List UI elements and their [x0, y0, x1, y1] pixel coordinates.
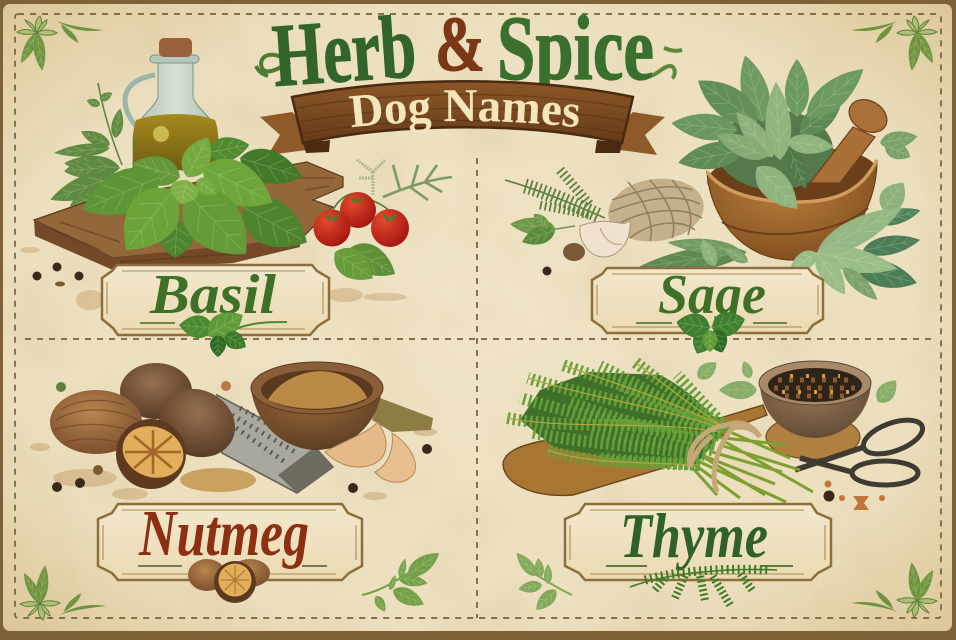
thyme bundle [507, 362, 728, 466]
title flourish left [256, 55, 290, 76]
ribbon grain [297, 94, 628, 134]
corner sprig: bottom left [20, 565, 106, 620]
overlapping leaf [786, 132, 835, 157]
title ampersand: & [435, 0, 485, 87]
green peppercorn [56, 382, 66, 392]
stains [20, 247, 407, 310]
panel: thyme [503, 357, 927, 615]
title flourish right [645, 48, 682, 78]
grater [217, 395, 333, 493]
sage bunch [670, 52, 872, 192]
bowl rim [707, 160, 877, 202]
pestle [810, 127, 875, 183]
banner [260, 80, 665, 155]
round board [766, 415, 860, 459]
cutting board [503, 405, 767, 495]
title word: Spice: Spice [497, 0, 654, 99]
vertical divider [476, 158, 478, 618]
pale dill [357, 160, 385, 195]
herb sprig [362, 547, 444, 614]
label [565, 500, 831, 605]
label text: Nutmeg [138, 497, 309, 570]
label text: Basil [149, 264, 276, 326]
ground spice [180, 468, 256, 492]
small leaves [693, 357, 903, 407]
basil leaves [74, 131, 318, 273]
horizontal divider [25, 338, 932, 340]
sage sprig right [785, 176, 922, 305]
twine [689, 423, 760, 492]
spice stains [30, 428, 437, 500]
pestle head [843, 93, 893, 139]
label sprig [674, 308, 748, 358]
label sprig [630, 569, 777, 605]
garlic [542, 220, 630, 276]
tomatoes [314, 192, 409, 247]
peppercorns [52, 381, 432, 493]
herb sprig [512, 549, 572, 615]
small floating sprig [879, 128, 919, 165]
scissors [795, 413, 927, 485]
small sprig [509, 210, 575, 250]
board edge [34, 220, 300, 270]
herb sprigs behind [46, 83, 126, 214]
bowl groove [722, 208, 868, 234]
grater holes [232, 408, 305, 462]
ribbon main [292, 81, 633, 143]
label [102, 264, 329, 357]
label underlines [606, 565, 793, 567]
front leaf [747, 157, 808, 219]
tomato vines [332, 193, 390, 212]
label underlines [138, 565, 327, 567]
twine ball [604, 173, 708, 247]
corner sprig: top right [851, 16, 937, 71]
corner sprig: bottom right [851, 562, 937, 617]
peppercorns [32, 262, 84, 286]
mortar bowl interior [705, 142, 879, 210]
subtitle: Dog Names [348, 90, 578, 130]
thyme stems [690, 432, 813, 502]
panel: nutmeg [30, 362, 444, 614]
bowl body [707, 160, 877, 260]
panel: basil [20, 38, 452, 357]
wood block [372, 398, 433, 432]
title [256, 0, 682, 106]
spice bowl [251, 362, 383, 450]
label [592, 264, 823, 358]
rosemary sprig [505, 170, 605, 218]
ribbon fold shadows [303, 140, 622, 153]
oil bottle [125, 38, 218, 170]
peppercorn and stains [824, 480, 885, 510]
label underlines [636, 322, 787, 324]
label underlines [140, 322, 175, 324]
green dill sprig [383, 165, 452, 200]
whole nutmegs [50, 363, 246, 489]
garlic cloves [325, 422, 415, 482]
herb garnish [327, 236, 402, 290]
label text: Sage [658, 264, 766, 326]
board grain [50, 178, 335, 262]
label text: Thyme [620, 500, 768, 571]
nutmeg slices [188, 559, 270, 603]
panel: sage [505, 52, 922, 358]
cutting board [34, 162, 343, 258]
label [98, 497, 362, 603]
pepper bowl [759, 361, 871, 438]
grater handle plate [278, 447, 333, 493]
corner sprig: top left [17, 16, 103, 71]
sage leaves on table [637, 235, 751, 278]
ribbon tails [260, 112, 665, 155]
label sprig [178, 304, 287, 357]
